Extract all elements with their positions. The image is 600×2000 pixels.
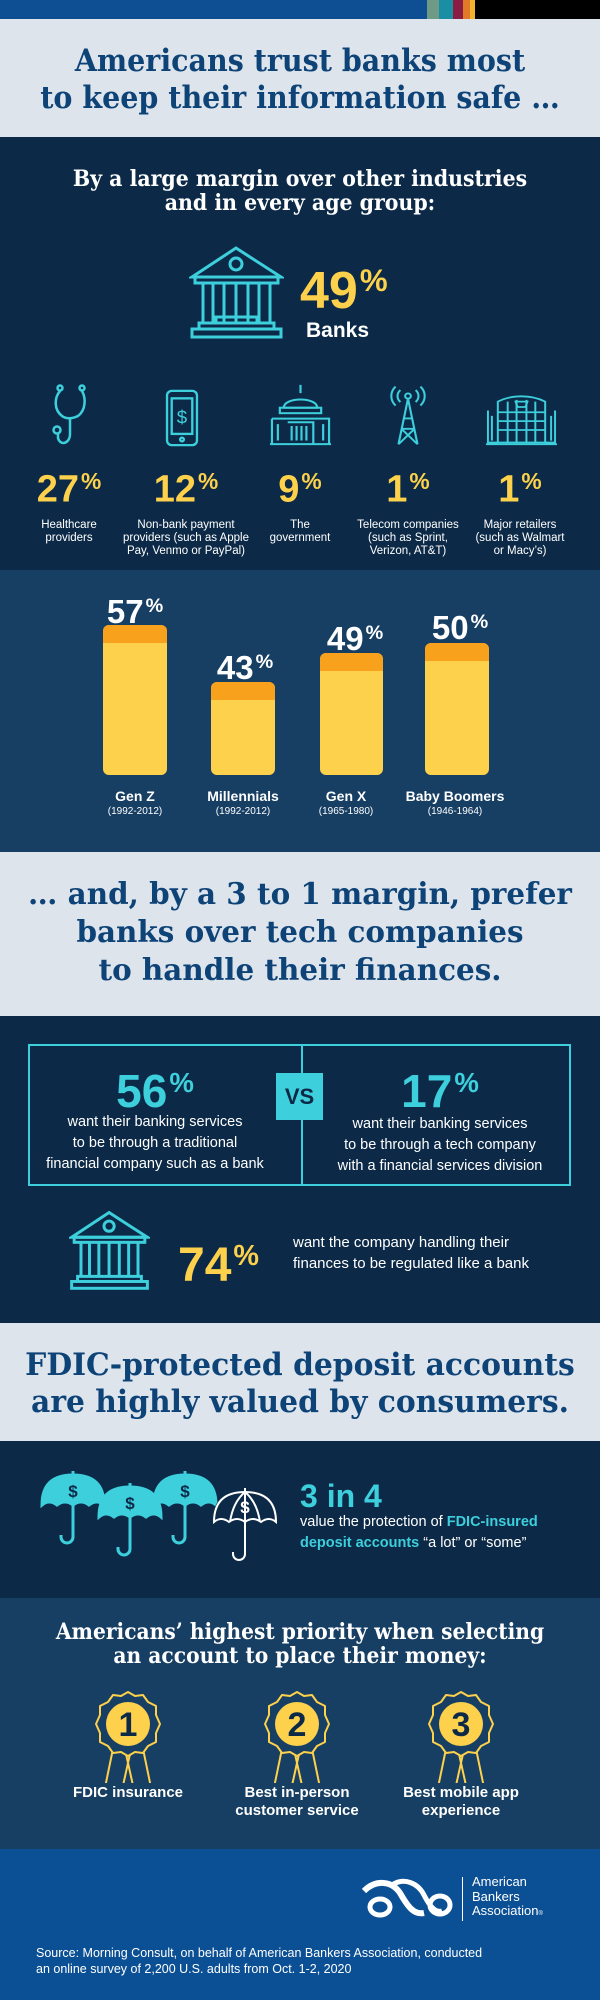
stat: non-bank: 12%	[154, 468, 218, 511]
stat: 56%: to be through a traditional	[73, 1135, 237, 1151]
bar labels: (1992-2012)	[108, 806, 162, 817]
icon: umbrellas: $	[240, 1498, 250, 1517]
text: value protection	[300, 1514, 538, 1551]
stat: retailers	[475, 468, 565, 557]
heading	[56, 1619, 544, 1669]
ribbons: 3	[452, 1706, 470, 1744]
icon: tower	[390, 386, 426, 445]
stat: telecom: Verizon, AT&T)	[370, 545, 446, 557]
bar chart: age groups: (1992-2012)	[216, 806, 270, 817]
heading: … and, by a 3 to 1 margin, prefer	[28, 877, 572, 912]
subtitle: By a large margin over other industries	[73, 166, 527, 192]
icon: stethoscope	[52, 384, 86, 444]
source text	[36, 1946, 482, 1976]
panel: priorities: Best in-person	[244, 1784, 350, 1801]
subtitle	[73, 166, 527, 216]
header panel	[0, 19, 600, 137]
logo: American	[472, 1874, 527, 1889]
stat: 17%: to be through a tech company	[344, 1137, 536, 1153]
heading: banks over tech companies	[76, 915, 524, 950]
subtitle: and in every age group:	[165, 190, 435, 216]
icon: umbrellas	[40, 1471, 277, 1561]
vs badge	[276, 1073, 323, 1120]
source text: Source: Morning Consult, on behalf of American Bankers Association, conducted	[36, 1946, 482, 1960]
comparison box	[28, 1044, 571, 1186]
bar chart: age groups: Millennials	[207, 788, 279, 804]
panel: priorities: experience	[422, 1802, 500, 1819]
heading panel: tech companies	[0, 852, 600, 1016]
bar chart: age groups: (1965-1980)	[319, 806, 373, 817]
stat: government	[270, 468, 330, 544]
stat: retailers: 1%	[498, 468, 542, 511]
top bar	[0, 0, 600, 19]
stat: non-bank: Non-bank payment	[137, 519, 235, 531]
stat: healthcare: providers	[45, 532, 93, 544]
heading: to handle their finances.	[98, 953, 502, 988]
heading: are highly valued by consumers.	[31, 1384, 569, 1420]
stat: healthcare: 27%	[37, 468, 101, 511]
heading	[25, 1347, 575, 1420]
bar chart: age groups: 50%	[432, 609, 488, 646]
text: value protection: deposit accounts “a lot” or “some”	[300, 1535, 526, 1551]
bar chart: age groups: 43%	[217, 649, 273, 686]
stat: healthcare: Healthcare	[41, 519, 97, 531]
icon: umbrellas: $	[125, 1494, 135, 1513]
bar chart: age groups: (1946-1964)	[428, 806, 482, 817]
stat: government: The	[290, 519, 310, 531]
icon: umbrellas: $	[68, 1482, 78, 1501]
stat: government: government	[270, 532, 330, 544]
stat: 74%: 74%	[178, 1239, 259, 1292]
text: value protection: value the protection of FDIC-insured	[300, 1514, 538, 1530]
text: regulated: want the company handling their	[293, 1234, 509, 1251]
icon: phone	[166, 390, 198, 446]
title	[40, 43, 560, 116]
panel: comparison	[0, 1016, 600, 1323]
icon: bank small	[69, 1210, 150, 1290]
bar values: 57%	[107, 593, 163, 630]
icon: government	[270, 384, 332, 446]
heading: Americans’ highest priority when selecting	[56, 1619, 544, 1645]
stat: 17%	[338, 1065, 542, 1174]
ribbons: 1	[119, 1706, 137, 1744]
panel: priorities: customer service	[235, 1802, 359, 1819]
stat row	[37, 468, 565, 557]
panel: industries	[0, 137, 600, 570]
icon: bank	[189, 246, 284, 338]
bar labels	[108, 788, 162, 817]
bar: Millennials	[211, 682, 275, 775]
stat: retailers: Major retailers	[484, 519, 556, 531]
logo: Bankers	[472, 1888, 520, 1904]
ribbons: 2	[288, 1706, 306, 1744]
vs badge: VS	[285, 1084, 314, 1109]
bar: Boomers	[425, 643, 489, 775]
bar chart: age groups: 49%	[327, 620, 383, 657]
stat: 56%: want their banking services	[68, 1114, 242, 1130]
heading panel: FDIC	[0, 1323, 600, 1441]
icon: retail building	[486, 395, 557, 446]
panel: priorities: Best mobile app	[403, 1784, 519, 1801]
stat: banks 49%: Banks	[306, 319, 369, 342]
stat: banks 49%: 49%	[300, 262, 388, 320]
stat: 17%: with a financial services division	[338, 1158, 542, 1174]
stat: healthcare	[37, 468, 101, 544]
stat: retailers: or Macy’s)	[494, 545, 546, 557]
source text: an online survey of 2,200 U.S. adults from Oct. 1-2, 2020	[36, 1962, 351, 1976]
footer	[0, 1849, 600, 2000]
bar chart: age groups	[0, 570, 600, 852]
icon: umbrellas: $	[180, 1482, 190, 1501]
stat: 17%: want their banking services	[353, 1116, 527, 1132]
panel: priorities	[0, 1598, 600, 1849]
stat: non-bank	[123, 468, 249, 557]
labels: FDIC insurance	[73, 1784, 183, 1801]
stat: telecom: (such as Sprint,	[368, 532, 448, 544]
text: regulated: finances to be regulated like a bank	[293, 1255, 529, 1272]
stat: 17%: 17%	[401, 1065, 479, 1117]
stat: 56%: financial company such as a bank	[46, 1156, 264, 1172]
text: regulated	[293, 1234, 529, 1272]
heading	[28, 877, 572, 988]
stat: non-bank: providers (such as Apple	[123, 532, 249, 544]
title: Americans trust banks most	[75, 43, 525, 79]
stat: telecom: Telecom companies	[357, 519, 459, 531]
bar labels: Gen Z	[115, 788, 155, 804]
bar: Gen X	[320, 653, 383, 775]
logo	[362, 1874, 543, 1921]
bar chart: age groups: Gen X	[326, 788, 366, 804]
bar: Gen Z	[103, 625, 167, 775]
stat: 56%	[46, 1065, 264, 1172]
stat: non-bank: Pay, Venmo or PayPal)	[127, 545, 245, 557]
icon: phone: $	[177, 407, 188, 428]
stat: government: 9%	[278, 468, 322, 511]
logo: Association®	[472, 1903, 543, 1918]
stat: 56%: 56%	[116, 1065, 194, 1117]
stat: retailers: (such as Walmart	[475, 532, 565, 544]
title: to keep their information safe …	[40, 80, 560, 116]
panel: umbrellas	[0, 1441, 600, 1598]
heading: FDIC-protected deposit accounts	[25, 1347, 575, 1383]
heading: an account to place their money:	[113, 1643, 487, 1669]
stat: telecom: 1%	[386, 468, 430, 511]
stat: 3 in 4: 3 in 4	[300, 1478, 382, 1514]
ribbons	[95, 1691, 494, 1783]
bar chart: age groups: Baby Boomers	[406, 788, 504, 804]
stat: telecom	[357, 468, 459, 557]
